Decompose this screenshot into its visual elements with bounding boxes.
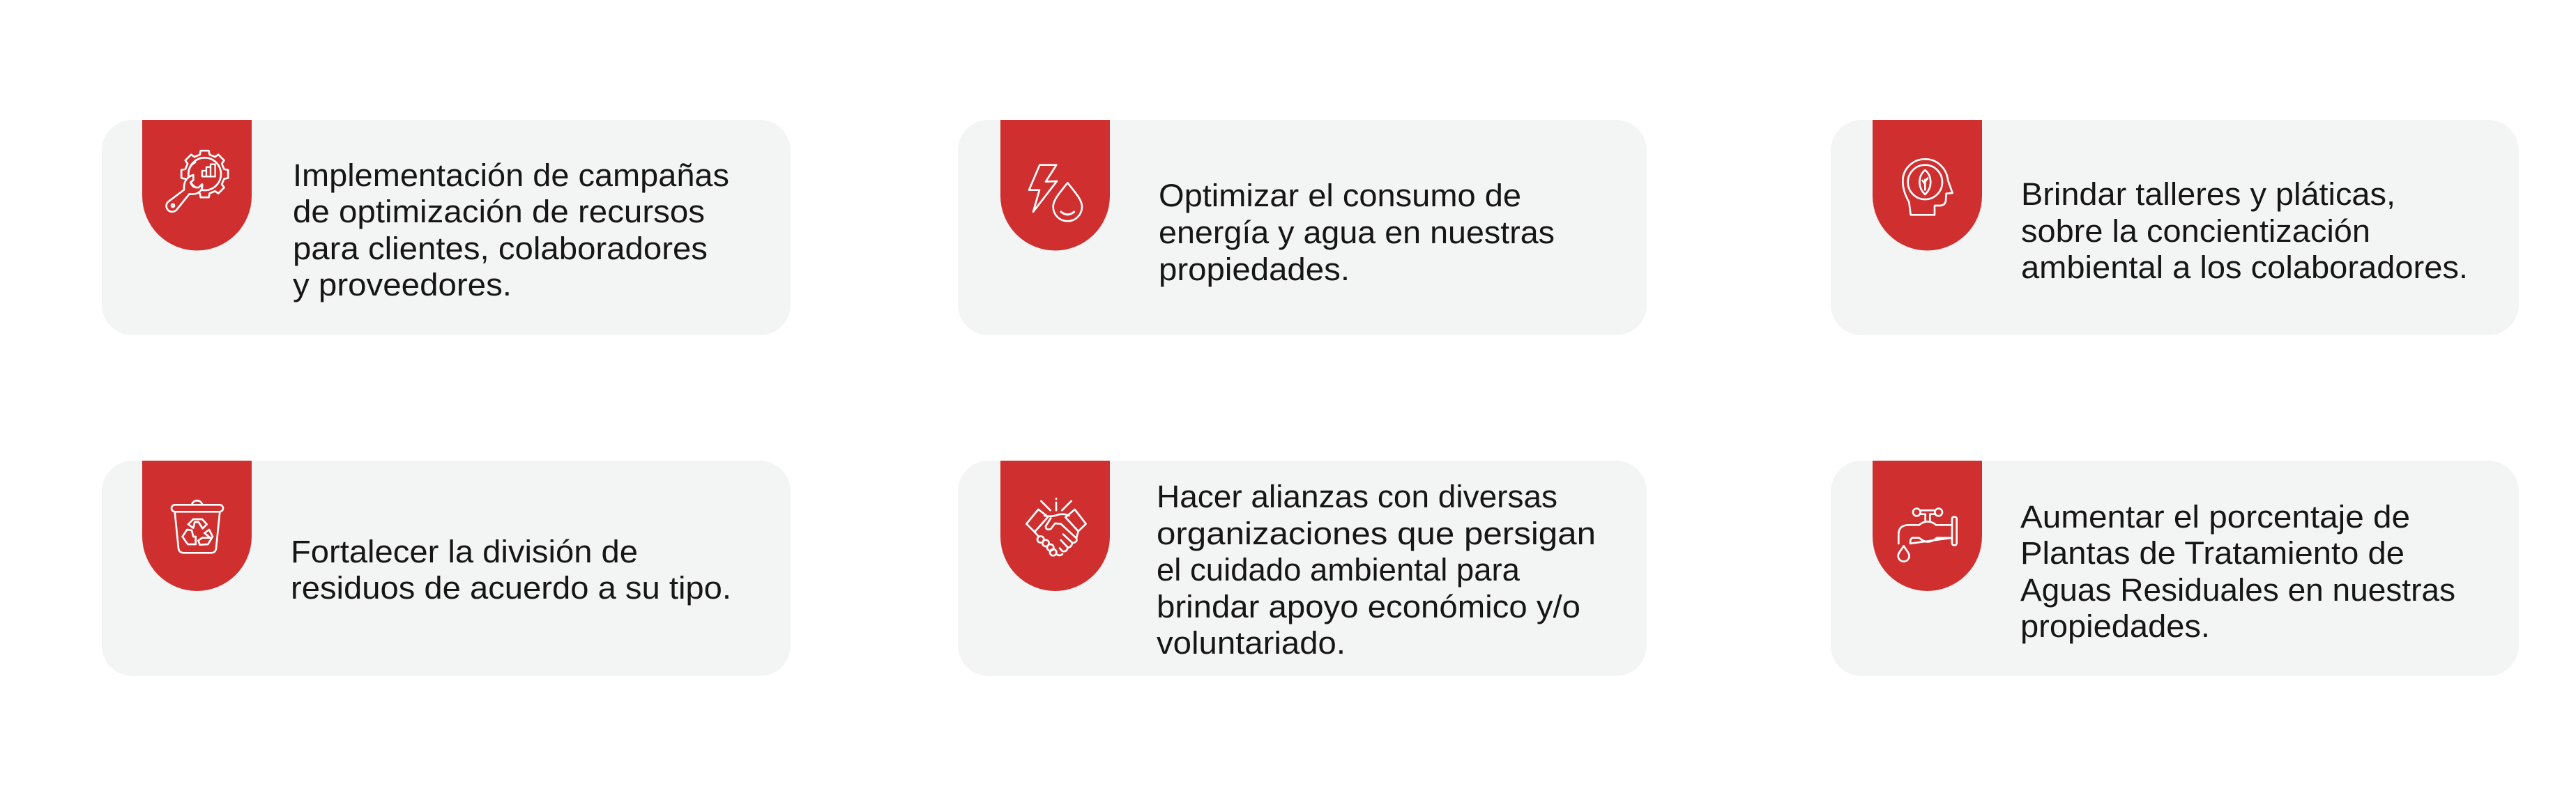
panel: división de residuos: [102, 461, 791, 676]
icon: lightning bolt and water drop: [1029, 165, 1082, 221]
icon: head with leaf: [1903, 159, 1953, 215]
panel: consumo de energía y agua: [958, 120, 1647, 335]
text: aumentar el porcentaje: Aumentar el porcentaje de: [2020, 499, 2410, 535]
text: optimizar el consumo: propiedades.: [1159, 252, 1350, 287]
text: fortalecer la división: Fortalecer la división de: [291, 534, 638, 569]
text: optimizar el consumo: [1159, 178, 1555, 287]
text: aumentar el porcentaje: Plantas de Tratamiento de: [2020, 535, 2404, 571]
panel: alianzas con organizaciones: [958, 461, 1647, 676]
text: brindar talleres: ambiental a los colaboradores.: [2021, 249, 2468, 285]
text: hacer alianzas: organizaciones que persigan: [1157, 516, 1596, 551]
text: hacer alianzas: voluntariado.: [1157, 625, 1346, 661]
icon: recycling bin: [172, 500, 223, 553]
text: implementación de campañas: de optimización de recursos: [293, 194, 705, 229]
text: implementación de campañas: Implementación de campañas: [293, 158, 729, 193]
text: aumentar el porcentaje: propiedades.: [2020, 608, 2210, 644]
text: aumentar el porcentaje: Aguas Residuales en nuestras: [2020, 572, 2455, 608]
text: brindar talleres: [2021, 176, 2468, 285]
text: fortalecer la división: residuos de acuerdo a su tipo.: [291, 570, 731, 606]
panel: plantas de tratamiento: [1831, 461, 2519, 676]
text: hacer alianzas: [1157, 479, 1596, 661]
text: fortalecer la división: [291, 534, 731, 606]
panel: campañas de optimización: [102, 120, 791, 335]
icon: gear with wrench and bars: [167, 151, 228, 212]
text: hacer alianzas: el cuidado ambiental para: [1157, 552, 1521, 588]
text: brindar talleres: sobre la concientización: [2021, 213, 2370, 249]
text: brindar talleres: Brindar talleres y pláticas,: [2021, 176, 2395, 212]
text: hacer alianzas: Hacer alianzas con diversas: [1157, 479, 1557, 514]
text: implementación de campañas: [293, 158, 729, 302]
text: implementación de campañas: para clientes, colaboradores: [293, 231, 708, 266]
text: optimizar el consumo: Optimizar el consumo de: [1159, 178, 1521, 213]
panel: talleres y pláticas: [1831, 120, 2519, 335]
text: aumentar el porcentaje: [2020, 499, 2455, 644]
text: implementación de campañas: y proveedores.: [293, 267, 512, 302]
icon: dripping faucet: [1898, 509, 1957, 562]
text: optimizar el consumo: energía y agua en nuestras: [1159, 215, 1555, 250]
icon: handshake: [1026, 498, 1086, 555]
text: hacer alianzas: brindar apoyo económico y/o: [1157, 589, 1580, 624]
